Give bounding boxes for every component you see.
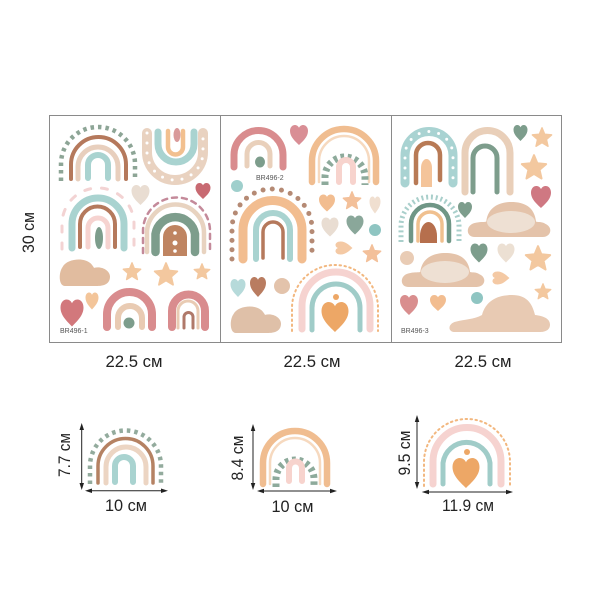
icon: green heart <box>470 244 488 262</box>
icon: rose heart <box>400 295 418 315</box>
icon: teal dot <box>369 224 381 236</box>
rainbow: rose with green dot <box>107 292 152 328</box>
icon: cloud bottom <box>449 295 550 332</box>
icon: orange heart <box>86 292 98 310</box>
sample: pink rainbow with heart <box>424 419 510 488</box>
rainbow: orange with green ticks <box>312 129 376 185</box>
dimension: 7.7 см: 7.7 см <box>55 433 74 477</box>
icon: mauve heart <box>290 125 308 145</box>
icon: tan dot <box>400 251 414 265</box>
rainbow: tan with green <box>465 130 510 192</box>
rainbow: upside-down U <box>147 128 203 180</box>
icon: orange heart <box>430 295 446 311</box>
rainbow: orange teal brown with brown dots <box>232 189 312 259</box>
dimension: sheet 1 width: 22.5 см <box>106 352 162 371</box>
icon: star <box>343 192 361 208</box>
icon: teal heart <box>230 279 246 297</box>
icon: cloud middle <box>402 253 484 287</box>
panel: sheet BR496-3 <box>392 116 562 342</box>
icon: star <box>532 128 552 146</box>
rainbow: teal brown pink with green drop <box>62 188 134 249</box>
panel: sheet BR496-2 <box>220 116 392 342</box>
icon: pale heart <box>370 196 380 214</box>
icon: green heart <box>514 125 528 141</box>
dimension: sheet 3 width: 22.5 см <box>454 352 512 371</box>
product code: BR496-2 <box>256 175 284 182</box>
icon: star large <box>155 263 177 285</box>
rainbow: green orange with brown door <box>401 197 459 243</box>
dimension: sheet 2 width: 22.5 см <box>284 352 340 371</box>
icon: red heart <box>196 183 210 199</box>
dimension: 11.9 см: 11.9 см <box>442 496 494 515</box>
rainbow: teal dotted with brown <box>405 132 453 187</box>
icon: tan dot <box>274 278 290 294</box>
icon: star right <box>194 264 210 279</box>
arrow: width 10 <box>85 488 168 493</box>
rainbow: rose with green dot <box>234 130 283 168</box>
icon: star large <box>522 155 546 178</box>
icon: sideways heart <box>336 242 352 254</box>
arrow: width 11.9 <box>422 490 513 494</box>
icon: orange heart <box>319 194 335 212</box>
icon: cloud <box>231 307 281 333</box>
icon: cream heart <box>322 218 338 236</box>
icon: star large <box>526 246 550 270</box>
icon: green heart <box>458 202 472 218</box>
icon: cloud large top <box>468 202 550 237</box>
icon: star <box>535 284 551 299</box>
sample: small rainbow with dots <box>90 431 161 484</box>
dimension: 8.4 см: 8.4 см <box>228 436 247 480</box>
icon: teal dot <box>471 292 483 304</box>
arrow: height 7.7 <box>80 423 84 490</box>
icon: brown heart <box>250 277 266 297</box>
icon: rose heart <box>60 300 84 326</box>
product code: BR496-1 <box>60 328 88 335</box>
icon: green heart <box>346 216 364 234</box>
sample: orange rainbow with green ticks <box>263 431 327 487</box>
rainbow: green with brown door <box>143 197 210 256</box>
rainbow: brown tan teal with green dots <box>61 127 135 181</box>
arrow: height 9.5 <box>415 415 419 489</box>
dimension: 10 см: 10 см <box>105 496 147 515</box>
icon: teal dot <box>231 180 243 192</box>
dimension: sheet height: 30 см <box>19 212 38 253</box>
icon: cream heart <box>132 185 150 205</box>
arrow: width 10 <box>257 489 337 493</box>
rainbow: pink teal with heart <box>292 265 378 332</box>
icon: cloud <box>60 260 110 286</box>
icon: cream heart <box>498 244 514 262</box>
icon: red heart <box>531 186 551 208</box>
dimension: 9.5 см: 9.5 см <box>395 430 414 476</box>
icon: star small <box>123 263 141 280</box>
product code: BR496-3 <box>401 328 429 335</box>
panel: sheet BR496-1 <box>50 116 220 342</box>
icon: star <box>363 245 381 262</box>
arrow: height 8.4 <box>251 424 255 490</box>
dimension: 10 см: 10 см <box>272 497 314 516</box>
rainbow: rose narrow <box>172 295 205 328</box>
icon: sideways heart <box>492 272 510 284</box>
